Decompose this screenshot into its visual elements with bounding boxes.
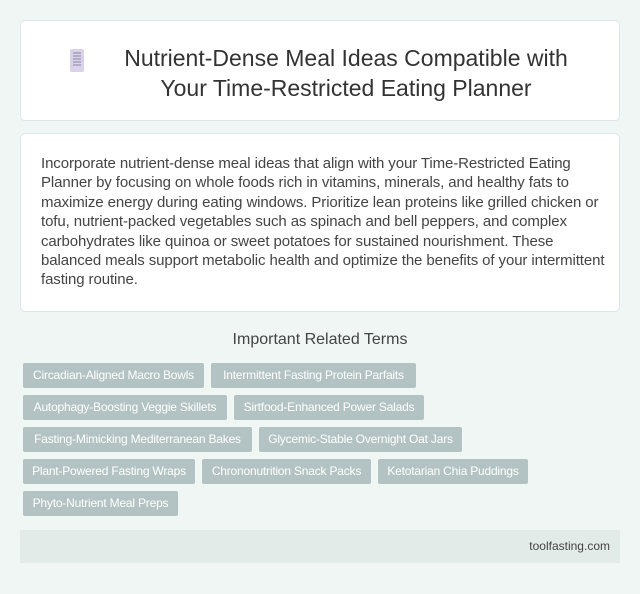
- tag: [378, 459, 528, 484]
- text block: description: Incorporate nutrient-dense meal ideas that align with your Time-Restricted Eating: [41, 155, 571, 172]
- tag: Phyto-Nutrient Meal Preps: [33, 496, 168, 510]
- tag: [202, 459, 371, 484]
- icon: document: [70, 49, 84, 72]
- tag: Plant-Powered Fasting Wraps: [32, 464, 186, 478]
- panel: description: [20, 133, 620, 312]
- tag: [23, 491, 178, 516]
- text block: description: maximize energy during eating windows. Prioritize lean proteins like grilled chicken or: [41, 194, 598, 211]
- tag: Glycemic-Stable Overnight Oat Jars: [268, 432, 453, 446]
- text block: description: tofu, nutrient-packed vegetables such as spinach and bell peppers, and complex: [41, 213, 567, 230]
- footer text: toolfasting.com: [529, 539, 610, 553]
- text block: description: balanced meals support metabolic health and optimize the benefits of your intermittent: [41, 252, 604, 269]
- tag: Chrononutrition Snack Packs: [212, 464, 361, 478]
- footer: [20, 530, 620, 563]
- tag: [23, 459, 195, 484]
- title: Nutrient-Dense Meal Ideas Compatible with: [124, 45, 568, 71]
- tag: [211, 363, 416, 388]
- tag: Sirtfood-Enhanced Power Salads: [244, 400, 414, 414]
- text block: description: Planner by focusing on whole foods rich in vitamins, minerals, and healthy fats to: [41, 174, 569, 191]
- tag: [23, 363, 204, 388]
- panel: header: [20, 20, 620, 121]
- tag: Autophagy-Boosting Veggie Skillets: [34, 400, 216, 414]
- tag: [259, 427, 462, 452]
- tag: [23, 427, 252, 452]
- text block: description: fasting routine.: [41, 271, 138, 288]
- text block: description: [41, 155, 604, 288]
- title: [124, 45, 568, 101]
- tag: Circadian-Aligned Macro Bowls: [33, 368, 194, 382]
- tag: Fasting-Mimicking Mediterranean Bakes: [34, 432, 241, 446]
- heading: related terms: Important Related Terms: [233, 331, 407, 348]
- text block: description: carbohydrates like quinoa or sweet potatoes for sustained nourishment. These: [41, 233, 553, 250]
- tag: [23, 395, 227, 420]
- title: Your Time-Restricted Eating Planner: [160, 75, 532, 101]
- tag: [234, 395, 424, 420]
- tag: Intermittent Fasting Protein Parfaits: [223, 368, 404, 382]
- tag: Ketotarian Chia Puddings: [387, 464, 519, 478]
